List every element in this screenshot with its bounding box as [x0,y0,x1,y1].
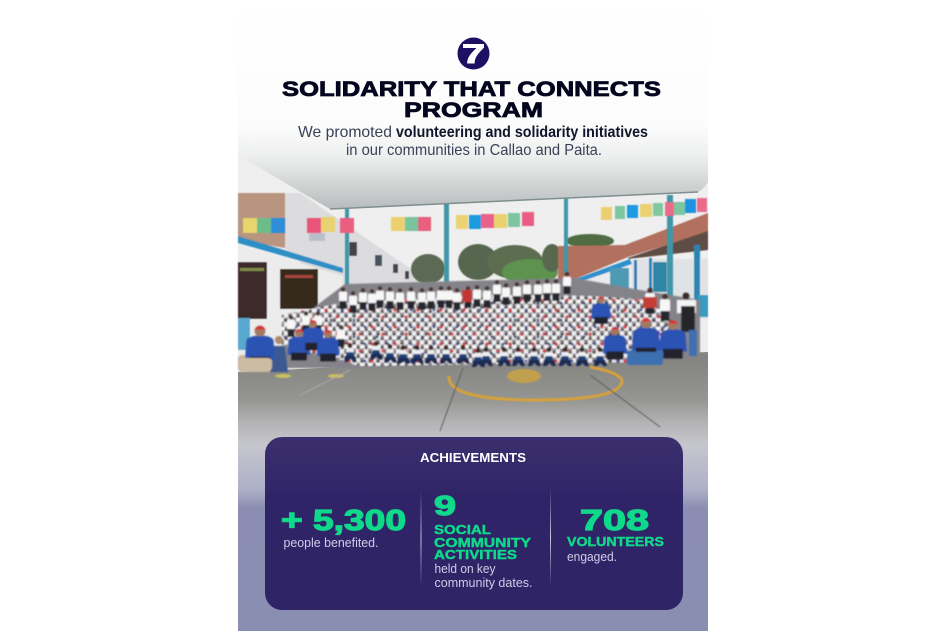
stat: social community activities: SOCIAL [434,523,491,537]
stat: volunteers engaged: VOLUNTEERS [567,535,664,549]
stat: social community activities: COMMUNITY [434,536,532,550]
bunting flags [243,198,707,233]
stat: social community activities [434,490,532,590]
stat: social community activities: held on key [434,561,496,576]
trees [411,234,614,285]
stat: volunteers engaged: 708 [580,505,649,537]
stat: volunteers engaged [567,505,664,564]
back row of standing adults [339,272,571,313]
santa hats and accents [282,294,672,366]
volunteers on the right [591,288,697,365]
volunteers in blue shirts, left [238,320,340,372]
crowd of children and volunteers [238,272,700,372]
title: SOLIDARITY THAT CONNECTS [282,77,661,101]
floor markings [275,367,660,431]
section number badge [458,38,490,70]
subtitle: in our communities in Callao and Paita. [346,142,602,159]
stat: people benefited: + 5,300 [281,505,406,537]
courtyard floor [238,352,708,631]
subtitle: volunteering and solidarity initiatives [396,124,648,141]
subtitle [298,124,648,159]
divider left [420,490,422,588]
divider right [550,488,551,587]
seated children mass [282,294,672,366]
subtitle: We promoted [298,124,392,141]
shadow backdrop behind the crowd [282,278,700,368]
left buildings [238,193,424,372]
photo: volunteers and children group portrait [238,0,708,631]
right buildings [558,213,708,319]
stat: people benefited [281,505,406,550]
stat: social community activities: ACTIVITIES [434,548,517,562]
stat: social community activities: community dates. [434,575,532,590]
stat: social community activities: 9 [434,490,456,521]
title: PROGRAM [404,98,543,122]
panel: achievements [265,437,683,610]
section number badge: 7 [462,39,485,69]
canopy poles [345,195,673,300]
stat: volunteers engaged: engaged. [567,549,617,564]
volunteers in white, left [287,311,345,347]
title [282,77,661,122]
panel heading: ACHIEVEMENTS [420,450,526,465]
front row of children [344,341,607,367]
canopy roof [238,0,708,209]
stat: people benefited: people benefited. [284,535,378,550]
